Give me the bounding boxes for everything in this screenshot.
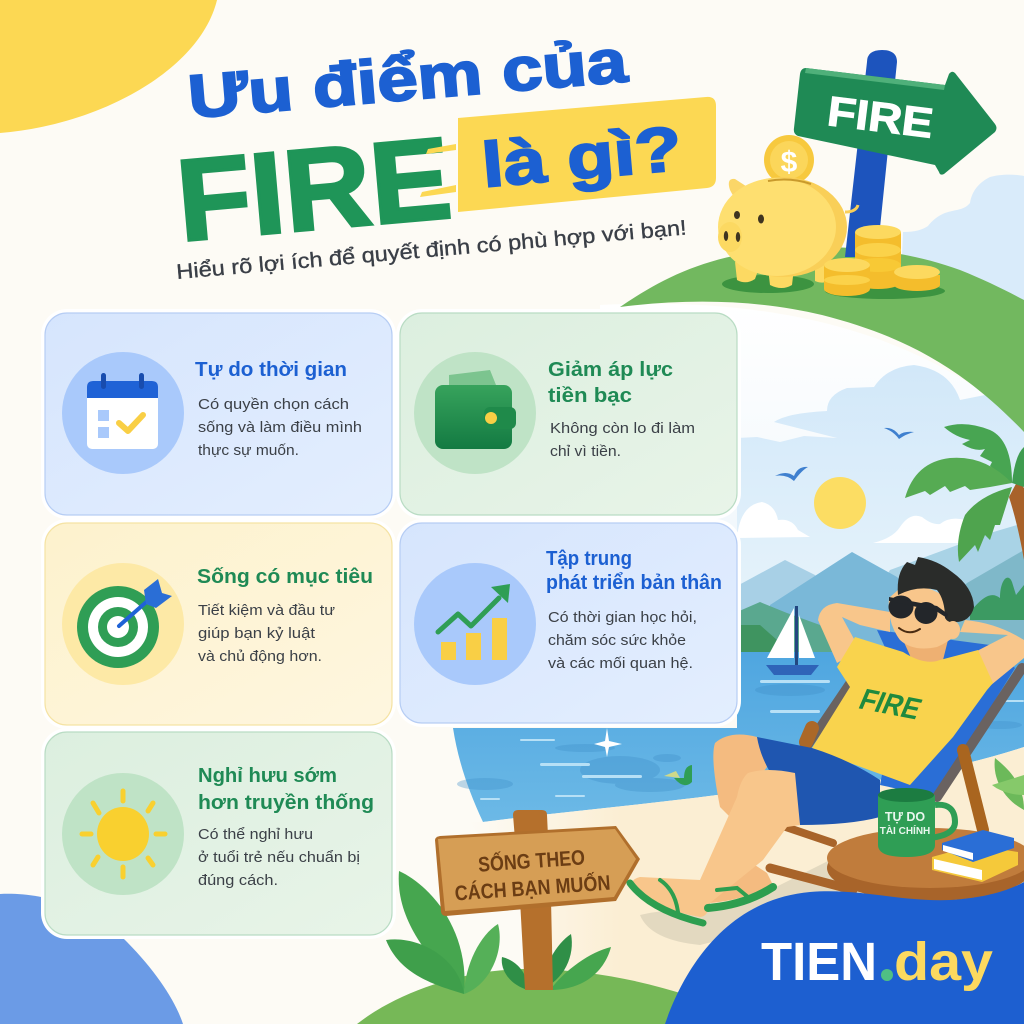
lower frond	[958, 487, 1012, 562]
rear leg	[713, 735, 767, 817]
body text: chăm sóc sức khỏe	[548, 632, 686, 649]
sign text: SỐNG THEO	[477, 845, 586, 877]
heading: Tự do thời gian	[195, 359, 347, 381]
heading: Giảm áp lực	[548, 359, 673, 381]
heading	[546, 548, 722, 594]
body text	[198, 826, 360, 889]
cloud behind hill	[900, 175, 1024, 330]
flip flops	[630, 880, 773, 923]
blue sky with cloud edge	[737, 365, 1024, 660]
bottom green hill	[357, 969, 690, 1024]
body text: Có thời gian học hỏi,	[548, 609, 697, 626]
body text	[550, 420, 695, 460]
white clouds	[737, 502, 965, 543]
coin: $	[781, 146, 798, 179]
sunglasses	[888, 596, 948, 624]
mug: TỰ DO	[885, 810, 925, 824]
coin stacks	[824, 225, 940, 296]
piggy bank	[718, 135, 945, 299]
table	[827, 828, 1024, 901]
green hill top right	[620, 247, 1024, 432]
FIRE signpost	[794, 50, 996, 257]
sea highlights	[480, 680, 1024, 800]
books	[932, 830, 1018, 882]
body	[719, 177, 847, 277]
shirt text: FIRE	[854, 684, 926, 726]
left frond	[905, 458, 1012, 498]
face	[889, 586, 960, 648]
sign text: CÁCH BẠN MUỐN	[454, 871, 611, 905]
decorative yellow blob top-left	[0, 0, 217, 133]
leaves	[386, 871, 611, 994]
palm tree	[905, 424, 1024, 562]
body text: và chủ động hơn.	[198, 648, 322, 665]
FIRE flame notches	[420, 144, 456, 197]
t-shirt	[812, 637, 993, 785]
heading: Nghỉ hưu sớm	[198, 765, 337, 787]
body text: Có quyền chọn cách	[198, 396, 349, 413]
icon: wallet	[414, 352, 536, 474]
sign board	[435, 826, 640, 916]
rear foot	[710, 857, 772, 903]
heading: tiền bạc	[548, 385, 632, 407]
heading: Sống có mục tiêu	[197, 566, 373, 588]
coin	[764, 135, 814, 185]
sand shadow	[640, 850, 880, 945]
beach scene background	[453, 304, 1024, 1024]
body text: sống và làm điều mình	[198, 419, 362, 436]
decorative blue blob bottom-left	[0, 894, 183, 1024]
chair fabric	[877, 630, 1015, 797]
upper pale sky	[600, 304, 1024, 600]
wooden sign scene	[357, 810, 690, 1024]
yellow highlight bar	[458, 97, 716, 212]
body text: Không còn lo đi làm	[550, 420, 695, 437]
panel: Song co muc tieu	[41, 519, 396, 729]
tail	[845, 205, 858, 212]
ear	[946, 621, 960, 639]
face details	[724, 211, 764, 242]
sparkle	[594, 728, 622, 757]
front leg	[632, 770, 800, 917]
shorts	[757, 737, 880, 825]
legs	[735, 262, 838, 288]
left arm	[818, 603, 890, 663]
sea plant	[664, 765, 692, 785]
relaxing man on chair	[630, 557, 1024, 945]
title FIRE: FIRE	[172, 113, 456, 266]
TIEN.day logo: day	[894, 932, 993, 992]
neck	[903, 640, 948, 664]
sand	[470, 747, 1024, 1024]
smile	[899, 628, 920, 632]
upper frond	[944, 424, 1012, 483]
panel: Nghi huu som	[41, 728, 396, 939]
body text: ở tuổi trẻ nếu chuẩn bị	[198, 849, 360, 866]
body text	[198, 602, 335, 665]
sailboat	[766, 606, 819, 675]
ear	[729, 179, 752, 205]
right frond	[1012, 447, 1024, 487]
icon: target	[62, 563, 184, 685]
board highlight	[805, 68, 945, 90]
small plant right	[992, 758, 1024, 810]
sign text	[454, 845, 611, 905]
body text: đúng cách.	[198, 872, 278, 889]
body text: giúp bạn kỷ luật	[198, 625, 316, 642]
title line 1: Ưu điểm của	[185, 26, 631, 131]
body text: thực sự muốn.	[198, 442, 299, 459]
panel: Tu do thoi gian	[41, 309, 396, 519]
mug	[878, 788, 955, 857]
heading	[198, 765, 374, 814]
icon: sun	[62, 773, 184, 895]
heading: phát triển bản thân	[546, 572, 722, 594]
panel: Tap trung phat trien ban than	[396, 519, 741, 727]
post	[845, 50, 897, 257]
body text	[198, 396, 362, 459]
mug: TÀI CHÍNH	[880, 824, 930, 837]
snout	[718, 222, 742, 252]
body text: chỉ vì tiền.	[550, 443, 621, 460]
TIEN.day logo: TIEN	[761, 932, 877, 992]
sea	[453, 652, 1024, 822]
subtitle: Hiểu rõ lợi ích để quyết định có phù hợp với bạn!	[175, 216, 687, 284]
heading: Tập trung	[546, 548, 632, 570]
icon: calendar	[62, 352, 184, 474]
ground shadows	[722, 275, 814, 293]
sign label: FIRE	[825, 87, 936, 147]
trunk	[1009, 480, 1024, 560]
panel: Giam ap luc tien bac	[396, 309, 741, 519]
title la gi: là gì?	[479, 114, 684, 201]
blue logo shape	[665, 882, 1024, 1024]
heading	[548, 359, 673, 407]
hair	[898, 557, 974, 622]
sun	[814, 477, 866, 529]
slot	[768, 180, 811, 184]
heading: hơn truyền thống	[198, 792, 374, 814]
birds	[775, 428, 914, 481]
body text: Có thể nghỉ hưu	[198, 826, 313, 843]
TIEN.day logo	[761, 932, 993, 992]
sea dark ripples	[457, 684, 1022, 792]
right arm	[960, 620, 1024, 690]
chair frame	[765, 668, 1022, 890]
body text	[548, 609, 697, 672]
sign post	[513, 810, 553, 990]
arrow board	[794, 68, 996, 175]
mountains	[737, 523, 1024, 655]
icon: growth chart	[414, 563, 536, 685]
body text: Tiết kiệm và đầu tư	[198, 602, 335, 619]
body text: và các mối quan hệ.	[548, 655, 693, 672]
